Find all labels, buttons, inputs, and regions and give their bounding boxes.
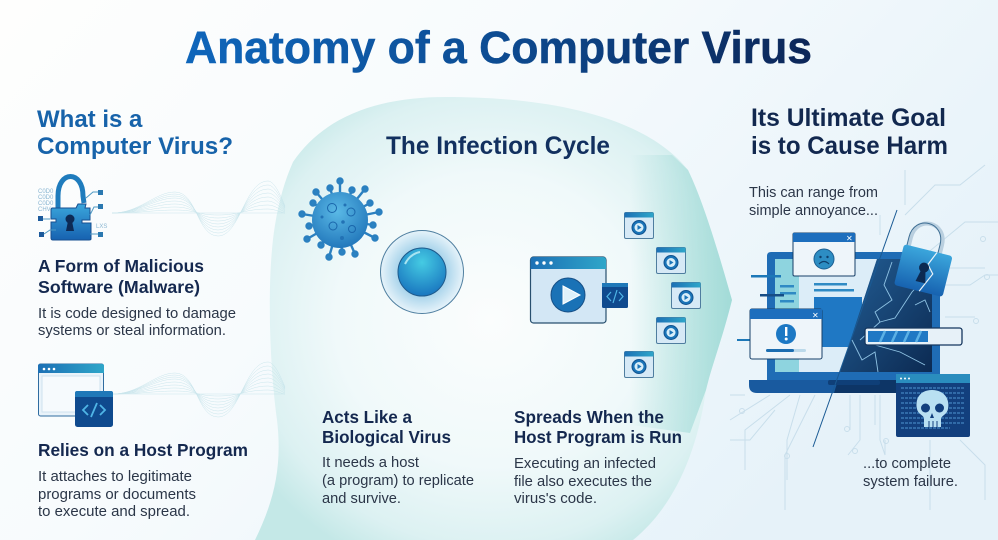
- icon: spreading program copy 2: [656, 248, 686, 274]
- left column: what is a computer virus: [37, 106, 285, 520]
- text: spreads when the host program is run: Host Program is Run: [514, 427, 682, 447]
- icon: host cell: [380, 230, 464, 314]
- heading: what is a computer virus: Computer Virus?: [37, 133, 233, 160]
- laptop base: [749, 380, 897, 393]
- text: malware description: systems or steal information.: [38, 323, 226, 339]
- text: host program run description: Executing an infected: [514, 456, 656, 472]
- heading: its ultimate goal: Its Ultimate Goal: [751, 104, 946, 132]
- sad face window: ✕: [846, 234, 853, 243]
- panel: infection cycle blob: [255, 97, 732, 540]
- icon: broken padlock with circuits: C0D0: [38, 189, 54, 195]
- icon: broken padlock with circuits: CHV: [38, 207, 51, 213]
- broken padlock: [894, 219, 959, 297]
- laptop base dark half: [834, 380, 897, 393]
- wave decoration 1: [112, 181, 285, 236]
- text: biological virus description: It needs a host: [322, 455, 419, 471]
- icon: broken padlock with circuits: LXS: [96, 224, 107, 230]
- text: relies on a host program: Relies on a Host Program: [38, 440, 248, 460]
- text: host program description: to execute and spread.: [38, 504, 190, 520]
- laptop body: [767, 252, 940, 380]
- title: Anatomy of a Computer Virus: [185, 22, 812, 73]
- progress bar: [865, 328, 962, 345]
- middle column: infection cycle: [300, 132, 700, 507]
- icon: broken padlock with circuits: C0D0: [38, 201, 54, 207]
- icon: spreading program copy 5: [624, 352, 654, 378]
- text: simple annoyance: simple annoyance...: [749, 203, 878, 219]
- text: spreads when the host program is run: Spreads When the: [514, 407, 664, 427]
- heading: the infection cycle: The Infection Cycle: [386, 132, 610, 160]
- heading: its ultimate goal: is to Cause Harm: [751, 132, 948, 160]
- icon: spreading program copy 3: [672, 282, 700, 308]
- icon: attached code window: [602, 283, 628, 308]
- arrow tip shading: [630, 155, 732, 433]
- sad face window: [793, 233, 855, 276]
- text: a form of malicious software: A Form of Malicious: [38, 256, 204, 276]
- text: simple annoyance: This can range from: [749, 185, 878, 201]
- icon: spreading program copy 4: [656, 318, 686, 344]
- diagonal split line: [813, 210, 897, 447]
- laptop cracked screen: [840, 259, 932, 372]
- icon: virus: [300, 178, 382, 260]
- text: complete system failure: system failure.: [863, 474, 958, 490]
- laptop healthy screen: [775, 259, 877, 372]
- text: acts like a biological virus: Biological Virus: [322, 427, 451, 447]
- speed marks: [737, 275, 784, 341]
- text: biological virus description: (a program) to replicate: [322, 473, 474, 489]
- text: acts like a biological virus: Acts Like a: [322, 407, 412, 427]
- text: a form of malicious software: Software (Malware): [38, 277, 200, 297]
- text: malware description: It is code designed to damage: [38, 306, 236, 322]
- skull window: [896, 374, 970, 437]
- text: host program run description: file also executes the: [514, 474, 652, 490]
- alert window: ✕: [812, 311, 819, 320]
- right column: ultimate goal: [737, 104, 970, 490]
- text: complete system failure: ...to complete: [863, 456, 951, 472]
- text: host program description: It attaches to legitimate: [38, 469, 192, 485]
- alert window: [750, 309, 822, 359]
- wave decoration 2: [112, 362, 285, 417]
- icon: spreading program copy 1: [624, 212, 654, 238]
- illustration: damaged laptop: [737, 210, 970, 447]
- text: host program description: programs or documents: [38, 487, 196, 503]
- icon: broken padlock with circuits: C0D0: [38, 195, 54, 201]
- text: host program run description: virus's code.: [514, 491, 597, 507]
- heading: what is a computer virus: What is a: [37, 106, 143, 133]
- icon: broken padlock with circuits: [38, 176, 107, 240]
- icon: host program window: [530, 257, 606, 323]
- background circuit lines: [730, 165, 998, 510]
- icon: host window with code: [38, 364, 113, 427]
- text: biological virus description: and survive.: [322, 491, 401, 507]
